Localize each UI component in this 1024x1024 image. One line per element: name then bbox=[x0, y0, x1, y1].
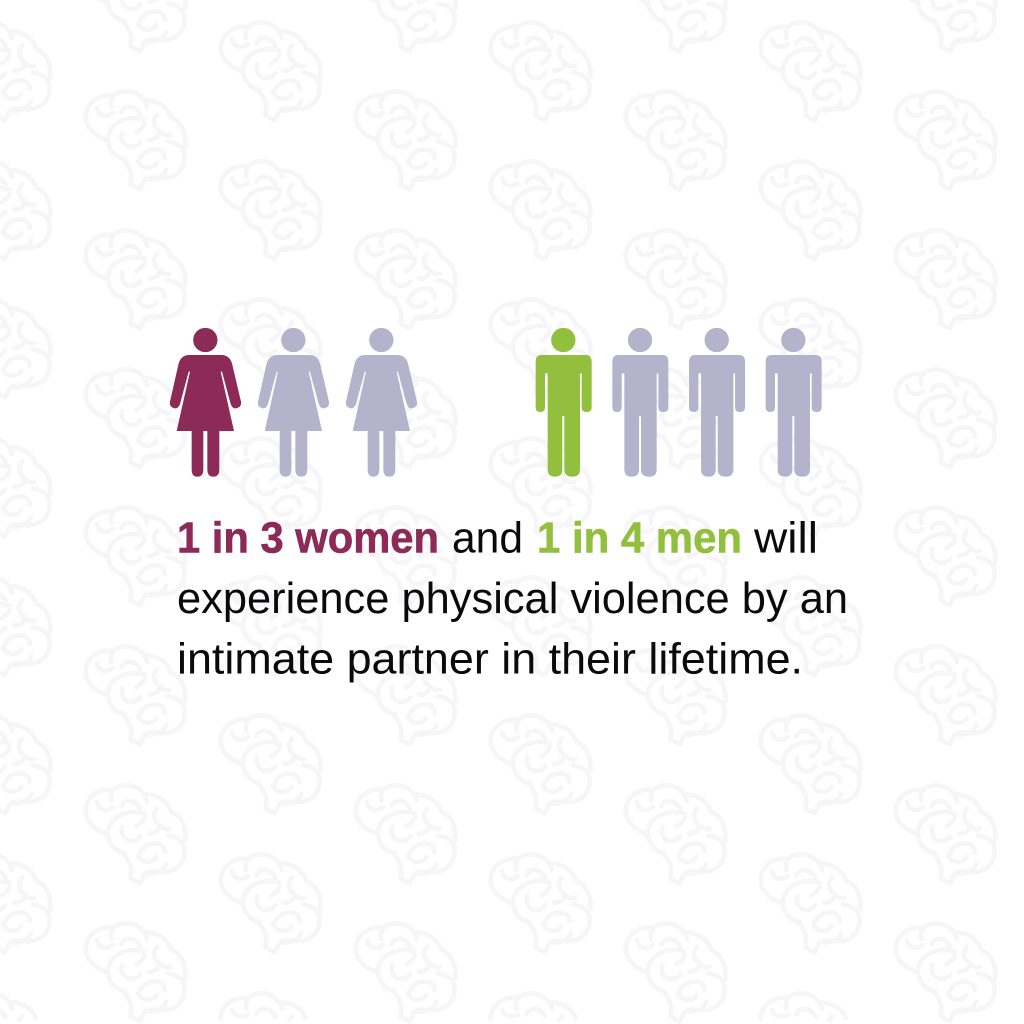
statistic statement text: intimate partner in their lifetime. bbox=[177, 634, 803, 683]
statistic statement text: 1 in 3 women bbox=[177, 514, 439, 563]
statistic statement text: and bbox=[452, 514, 523, 563]
statistic statement text: experience physical violence by an bbox=[177, 574, 848, 623]
icon: woman grey 1 bbox=[258, 328, 329, 477]
icon: man grey 2 bbox=[689, 328, 745, 477]
icon: man highlighted bbox=[536, 328, 592, 477]
statistic statement text bbox=[177, 514, 848, 683]
statistic statement text: 1 in 4 men bbox=[537, 514, 742, 563]
women pictogram row: 1 in 3 bbox=[170, 328, 417, 477]
statistic statement text: will bbox=[753, 514, 818, 563]
icon: woman highlighted bbox=[170, 328, 241, 477]
men pictogram row: 1 in 4 bbox=[536, 328, 822, 477]
icon: woman grey 2 bbox=[346, 328, 417, 477]
icon: man grey 3 bbox=[766, 328, 822, 477]
icon: man grey 1 bbox=[612, 328, 668, 477]
